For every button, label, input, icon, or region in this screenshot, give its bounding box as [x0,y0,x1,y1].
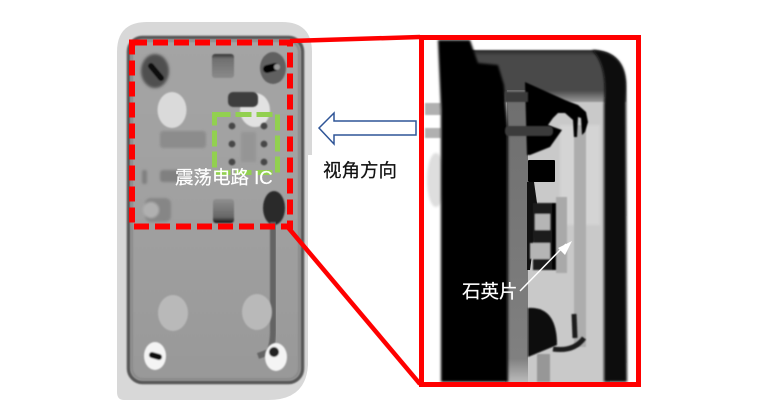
light rectangle behind components [556,197,567,273]
quartz strip [574,125,586,347]
view direction arrow [319,113,416,144]
right dark wall [592,50,627,382]
thin support [527,182,538,270]
x-ray image: top view of device [117,22,312,400]
resonator component stack [530,203,556,270]
red dashed selection box [132,42,290,226]
right white oval [240,93,270,127]
grey strip [507,90,528,382]
bottom left round part [143,198,171,222]
inner grey rim [132,41,299,379]
IC pins [229,123,267,165]
bottom centre component [213,199,234,223]
top centre component [212,54,234,78]
mid bars [505,92,553,136]
x-ray image: side view zoom [425,40,627,382]
top bracket [525,82,588,155]
label: quartz plate: 石英片 [462,281,518,302]
black front block [438,40,508,382]
inner cavity with dark rim [128,38,302,382]
light glow near bracket [560,125,600,225]
wire [258,222,273,356]
left pale blob [427,153,445,207]
zoom connector lines [286,37,420,384]
top dark band [470,50,626,102]
upper right mounting hole [260,52,286,84]
pointer arrow to quartz [520,241,572,291]
cable [537,354,550,382]
lower right dark oval [263,191,285,225]
dark component by oval [228,92,258,107]
black chunk [528,160,555,182]
bottom black blob [528,308,557,357]
label: oscillator IC: 震荡电路 IC [175,167,273,188]
lower left hole [144,342,166,370]
device outer casing [117,22,312,400]
lower left oval [158,295,188,331]
lower right hole [265,343,287,371]
left white oval [158,92,186,128]
label: view direction: 视角方向 [323,160,397,181]
green dashed IC box [214,114,278,172]
light interior [505,95,610,382]
upper left mounting hole [141,54,169,88]
bottom hook [553,314,584,350]
left prongs [425,103,441,138]
lower left pad patch [160,131,206,148]
small left parts [142,170,184,184]
IC die [241,132,256,162]
red zoom frame [422,38,638,384]
lower right oval [242,294,272,330]
